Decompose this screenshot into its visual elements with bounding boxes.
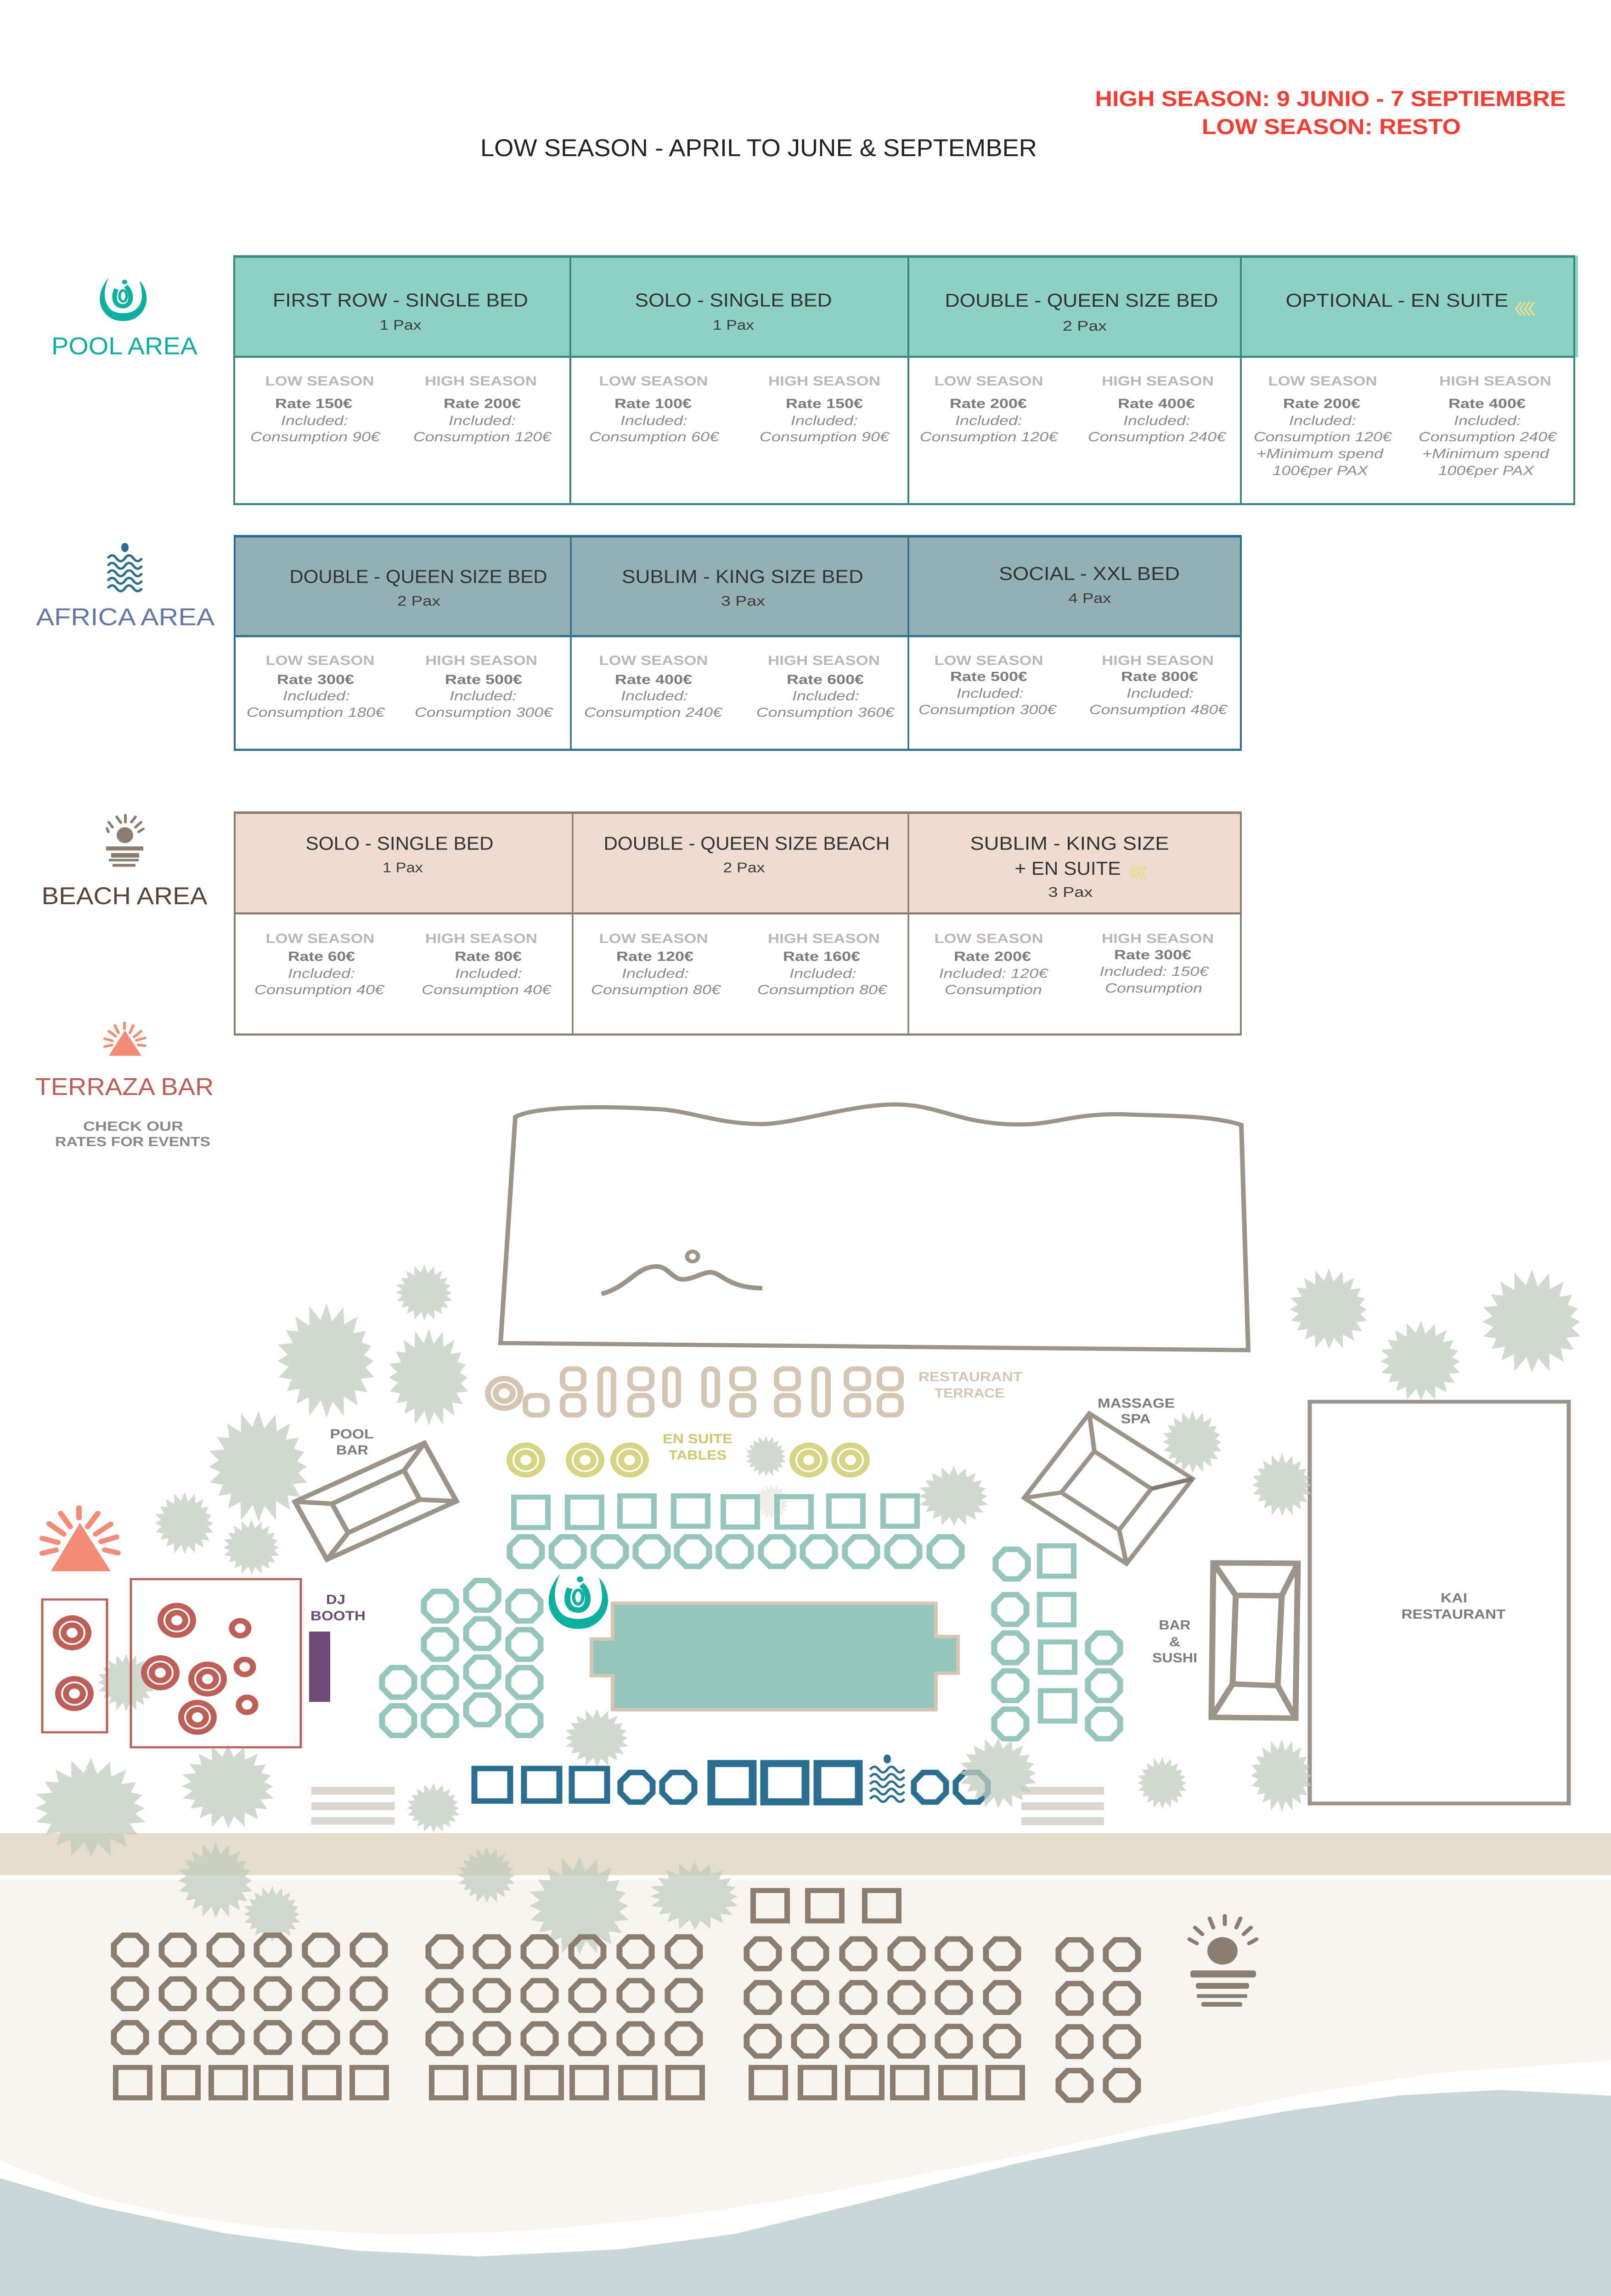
header: sublim king size plus en suite: SUBLIM - KING SIZE	[970, 833, 1169, 854]
header: solo single bed: SOLO - SINGLE BED	[306, 833, 494, 854]
rates: sublim high	[1099, 931, 1214, 996]
label: dj booth: DJ	[326, 1593, 345, 1607]
rates: double low: Consumption 120€	[920, 429, 1059, 445]
rates: first row low: Rate 150€	[275, 396, 352, 411]
header: double queen size bed: DOUBLE - QUEEN SIZE BED	[945, 290, 1218, 311]
icon: beach sun	[106, 815, 143, 867]
terraza tables	[42, 1579, 301, 1747]
rates: sublim low: Included: 120€	[939, 966, 1049, 981]
season notice: LOW SEASON: RESTO	[1202, 114, 1461, 139]
rates: first row high: Included:	[449, 413, 516, 428]
panel: africa area rate table	[234, 535, 1241, 750]
pool beds: left octagon cluster	[382, 1581, 541, 1735]
header: double queen size bed: 2 Pax	[1063, 318, 1107, 334]
label: restaurant terrace: RESTAURANT	[918, 1370, 1022, 1384]
title: LOW SEASON - APRIL TO JUNE & SEPTEMBER	[480, 134, 1037, 161]
rates: sublim high	[756, 653, 895, 720]
rates: social high: Rate 800€	[1121, 670, 1198, 684]
rates: sublim low: LOW SEASON	[599, 653, 708, 668]
rates: double low: LOW SEASON	[934, 374, 1043, 388]
rates: solo high: Consumption 90€	[760, 429, 890, 445]
rates: sublim low: Rate 400€	[615, 672, 692, 687]
label: bar and sushi: &	[1169, 1634, 1180, 1649]
icon: mountain and sun mark	[602, 1251, 762, 1294]
rates: first row low: Included:	[281, 413, 348, 428]
rates: en suite low: 100€per PAX	[1273, 463, 1369, 478]
rates: en suite high: 100€per PAX	[1438, 463, 1535, 478]
steps right	[1021, 1787, 1104, 1825]
rates: social high: HIGH SEASON	[1102, 653, 1214, 668]
rates: sublim low	[584, 653, 723, 720]
africa beds row	[474, 1763, 988, 1802]
header: first row single bed: 1 Pax	[379, 317, 421, 333]
header: double queen size bed	[945, 290, 1218, 334]
icon: pool swirl	[100, 278, 146, 321]
events note: CHECK OUR	[83, 1119, 183, 1134]
pool beds: right cluster	[994, 1546, 1120, 1739]
sea area outline	[501, 1104, 1248, 1350]
rates: double low: LOW SEASON	[265, 653, 374, 668]
label: bar and sushi: SUSHI	[1152, 1650, 1197, 1666]
en suite tables	[510, 1445, 867, 1475]
label: en suite tables	[663, 1432, 732, 1463]
rates: en suite high: +Minimum spend	[1422, 446, 1549, 461]
label: massage spa: MASSAGE	[1098, 1396, 1175, 1411]
rates: social low: LOW SEASON	[934, 653, 1043, 668]
rates: solo low: LOW SEASON	[599, 374, 708, 388]
rates: sublim high: Included: 150€	[1099, 964, 1210, 979]
icon: terraza sun on map	[42, 1508, 118, 1571]
rates: solo low	[589, 374, 720, 445]
rates: double high: Rate 400€	[1118, 396, 1195, 411]
header: double queen size bed: DOUBLE - QUEEN SIZE BED	[289, 566, 547, 587]
bar and sushi building	[1211, 1563, 1298, 1718]
rates: double low: Rate 120€	[616, 949, 693, 964]
rates: sublim high: HIGH SEASON	[1102, 931, 1214, 946]
beach area heading: BEACH AREA	[41, 883, 208, 910]
rates: solo low: Consumption 40€	[254, 982, 385, 997]
label: en suite tables: EN SUITE	[663, 1432, 732, 1446]
header: solo single bed	[306, 833, 493, 875]
pool beds row: squares	[514, 1496, 917, 1527]
rates: en suite low	[1254, 374, 1392, 478]
header: solo single bed: SOLO - SINGLE BED	[635, 290, 832, 311]
panel: africa area label	[36, 543, 215, 630]
season notice: HIGH SEASON: 9 JUNIO - 7 SEPTIEMBRE	[1095, 86, 1566, 111]
header: optional en suite: OPTIONAL - EN SUITE	[1286, 290, 1508, 311]
rates: solo low: Consumption 60€	[589, 429, 720, 445]
pool	[591, 1603, 958, 1710]
restaurant terrace tables	[488, 1369, 901, 1415]
label: bar and sushi	[1152, 1618, 1197, 1666]
header: sublim king size plus en suite	[970, 833, 1169, 900]
label: en suite tables: TABLES	[669, 1448, 727, 1463]
label: dj booth	[310, 1593, 366, 1623]
steps left	[311, 1787, 394, 1825]
rates: double high	[757, 931, 888, 997]
promenade band	[0, 1833, 1611, 1875]
rates: sublim low: Consumption 240€	[584, 705, 723, 720]
rates: double low	[591, 931, 721, 997]
rates: double high: Included:	[1123, 413, 1190, 428]
rates: double low	[920, 374, 1059, 445]
rates: en suite high	[1419, 374, 1557, 478]
beach beds: block three	[747, 1891, 1022, 2098]
panel: pool area rate table	[233, 256, 1578, 504]
rates: social low: Included:	[957, 686, 1024, 701]
beach beds: block four	[1059, 1940, 1138, 2100]
rates: double low	[247, 653, 385, 720]
panel: pool area label	[51, 278, 197, 360]
rates: en suite low: +Minimum spend	[1256, 446, 1384, 461]
rates: en suite low: LOW SEASON	[1268, 374, 1377, 388]
beach beds: block one	[114, 1935, 386, 2098]
rates: solo high: HIGH SEASON	[768, 374, 880, 388]
rates: en suite high: HIGH SEASON	[1439, 374, 1551, 388]
rates: social high: Consumption 480€	[1089, 702, 1228, 717]
sea	[0, 2090, 1611, 2296]
rates: double high: Consumption 80€	[757, 982, 888, 997]
rates: first row low	[250, 374, 381, 445]
dj booth	[309, 1632, 330, 1702]
rates: first row low: LOW SEASON	[265, 374, 374, 388]
rates: sublim high: Consumption	[1105, 981, 1202, 996]
rates: solo high	[760, 374, 890, 445]
rates: sublim high: Rate 300€	[1114, 947, 1191, 962]
terraza small enclosure	[42, 1599, 107, 1732]
rates: sublim high: HIGH SEASON	[768, 653, 880, 668]
massage spa building	[1024, 1413, 1193, 1564]
rates: solo low: Rate 100€	[614, 396, 692, 411]
events note	[55, 1119, 210, 1149]
terraza large enclosure	[131, 1579, 301, 1747]
rates: double low: Rate 300€	[277, 672, 354, 687]
rates: first row high: Consumption 120€	[413, 429, 552, 445]
header: double queen size beach: 2 Pax	[723, 860, 765, 875]
label: massage spa: SPA	[1121, 1412, 1150, 1426]
rates: sublim low: Rate 200€	[954, 949, 1031, 964]
rates: en suite low: Rate 200€	[1283, 396, 1360, 411]
africa area heading: AFRICA AREA	[36, 603, 215, 630]
rates: double low: Consumption 180€	[247, 705, 385, 720]
rates: solo low: Rate 60€	[288, 949, 355, 964]
header: double queen size beach	[603, 833, 890, 875]
rates: sublim low: Included:	[621, 688, 688, 703]
header: first row single bed	[273, 290, 528, 333]
events note: RATES FOR EVENTS	[55, 1134, 210, 1149]
rates: en suite low: Included:	[1289, 413, 1356, 428]
icon: en suite chevrons	[1129, 866, 1146, 879]
icon: terraza sun	[105, 1023, 145, 1056]
rates: double high: HIGH SEASON	[768, 931, 880, 946]
rates: en suite high: Consumption 240€	[1419, 429, 1557, 445]
header: solo single bed: 1 Pax	[383, 860, 423, 875]
rates: solo low: Included:	[288, 966, 355, 981]
sand area	[0, 1880, 1611, 2235]
panel: terraza bar label	[35, 1023, 214, 1149]
rates: first row high: Rate 200€	[444, 396, 521, 411]
icon: africa waves on map	[870, 1755, 904, 1802]
rates: solo high: Included:	[455, 966, 522, 981]
rates: social low: Rate 500€	[950, 670, 1027, 684]
rates: first row low: Consumption 90€	[250, 429, 381, 445]
panel: beach ground	[0, 1833, 1611, 2296]
header: sublim king size bed: 3 Pax	[721, 593, 765, 609]
trees over buildings	[960, 1453, 1312, 1812]
rates: solo high: HIGH SEASON	[425, 931, 537, 946]
rates: en suite low: Consumption 120€	[1254, 429, 1392, 445]
rates: solo low: Included:	[620, 413, 687, 428]
rates: first row high: HIGH SEASON	[425, 374, 537, 388]
header: sublim king size bed: SUBLIM - KING SIZE BED	[622, 566, 863, 587]
panel: beach area label	[41, 815, 208, 910]
icon: africa waves	[108, 543, 142, 591]
label: kai restaurant: RESTAURANT	[1401, 1607, 1506, 1622]
rates: sublim low: Consumption	[945, 982, 1042, 997]
terraza bar heading: TERRAZA BAR	[35, 1073, 214, 1100]
label: massage spa	[1098, 1396, 1175, 1426]
header: double queen size bed: 2 Pax	[397, 593, 440, 609]
rates: solo low: LOW SEASON	[265, 931, 374, 946]
label: restaurant terrace	[918, 1370, 1022, 1401]
rates: double high: Included:	[789, 966, 856, 981]
header: social xxl bed: 4 Pax	[1068, 590, 1111, 606]
pool area heading: POOL AREA	[51, 332, 197, 360]
label: pool bar: POOL	[330, 1427, 373, 1441]
rates: first row high	[413, 374, 552, 445]
pool bar building	[295, 1443, 456, 1559]
header: social xxl bed: SOCIAL - XXL BED	[999, 563, 1180, 584]
rates: double high: Consumption 300€	[415, 705, 553, 720]
header: sublim king size plus en suite: + EN SUITE	[1014, 858, 1121, 879]
rates: double high: Rate 500€	[445, 672, 522, 687]
rates: solo high: Rate 80€	[455, 949, 522, 964]
rates: en suite high: Rate 400€	[1448, 396, 1526, 411]
label: restaurant terrace: TERRACE	[935, 1386, 1004, 1401]
label: kai restaurant	[1401, 1591, 1506, 1622]
rates: double low: Included:	[955, 413, 1022, 428]
rates: en suite high: Included:	[1454, 413, 1521, 428]
label: pool bar: BAR	[336, 1443, 368, 1458]
header: solo single bed	[635, 290, 832, 333]
rates: double high	[1088, 374, 1227, 445]
header: double queen size beach: DOUBLE - QUEEN SIZE BEACH	[603, 833, 890, 854]
rates: double low: Included:	[283, 688, 350, 703]
label: kai restaurant: KAI	[1441, 1591, 1467, 1605]
rates: double low: Included:	[622, 966, 689, 981]
label: pool bar	[330, 1427, 374, 1458]
rates: solo high	[422, 931, 552, 997]
pool beds row: octagons	[510, 1537, 962, 1566]
rates: double low: Consumption 80€	[591, 982, 721, 997]
panel: beach area rate table	[234, 812, 1241, 1035]
rates: sublim high: Rate 600€	[787, 672, 864, 687]
header: sublim king size plus en suite: 3 Pax	[1048, 884, 1093, 900]
icon: pool swirl on map	[549, 1574, 608, 1629]
label: bar and sushi: BAR	[1159, 1618, 1190, 1632]
rates: sublim high: Included:	[792, 688, 859, 703]
rates: double high: Rate 160€	[783, 949, 860, 964]
rates: double high: Included:	[450, 688, 517, 703]
trees	[35, 1264, 1581, 1955]
rates: social high: Included:	[1127, 686, 1194, 701]
icon: beach sun on map	[1189, 1916, 1256, 2007]
rates: double low: LOW SEASON	[599, 931, 708, 946]
rates: double high: Consumption 240€	[1088, 429, 1227, 445]
rates: solo low	[254, 931, 385, 997]
rates: sublim high: Consumption 360€	[756, 705, 895, 720]
beach beds: block two	[428, 1937, 702, 2098]
rates: double high: HIGH SEASON	[425, 653, 537, 668]
rates: social high	[1089, 653, 1228, 717]
rates: double low: Rate 200€	[950, 396, 1027, 411]
rates: sublim low	[934, 931, 1049, 997]
icon: en suite chevrons	[1516, 302, 1534, 315]
label: dj booth: BOOTH	[310, 1609, 366, 1623]
season notice	[1095, 86, 1566, 139]
header: social xxl bed	[999, 563, 1180, 606]
rates: solo high: Rate 150€	[786, 396, 863, 411]
rates: sublim low: LOW SEASON	[934, 931, 1043, 946]
rates: solo high: Consumption 40€	[422, 982, 552, 997]
rates: solo high: Included:	[791, 413, 858, 428]
kai restaurant building	[1310, 1402, 1569, 1803]
header: double queen size bed	[289, 566, 547, 609]
rates: social low	[918, 653, 1057, 717]
rates: double high	[415, 653, 553, 720]
rates: social low: Consumption 300€	[918, 702, 1057, 717]
header: sublim king size bed	[622, 566, 863, 609]
rates: double high: HIGH SEASON	[1102, 374, 1214, 388]
header: solo single bed: 1 Pax	[713, 317, 754, 333]
header: first row single bed: FIRST ROW - SINGLE BED	[273, 290, 528, 311]
